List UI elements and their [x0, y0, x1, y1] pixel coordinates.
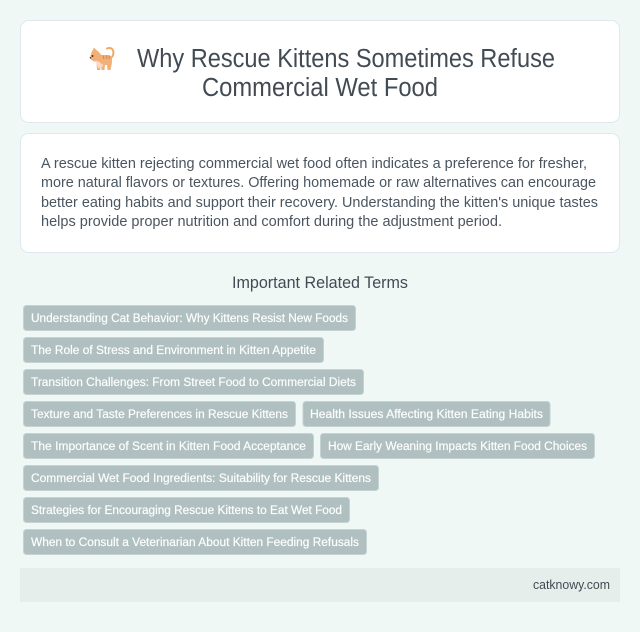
summary text: more natural flavors or textures. Offering homemade or raw alternatives can encourage [41, 175, 596, 191]
summary text: helps provide proper nutrition and comfort during the adjustment period. [41, 214, 502, 230]
tag [320, 434, 594, 458]
tag list [24, 306, 594, 554]
title: Why Rescue Kittens Sometimes Refuse [137, 45, 555, 73]
tag [303, 402, 550, 426]
tag [24, 306, 356, 330]
panel: summary card [20, 134, 620, 252]
icon: orange cat [90, 48, 113, 70]
tag [24, 498, 350, 522]
summary text: better eating habits and support their recovery. Understanding the kitten's unique tastes [41, 195, 598, 211]
tag [24, 338, 324, 362]
tag [24, 370, 364, 394]
summary text [41, 156, 598, 230]
tag: Texture and Taste Preferences in Rescue Kittens [31, 407, 288, 421]
title: Commercial Wet Food [202, 74, 438, 102]
tag: Health Issues Affecting Kitten Eating Habits [310, 407, 543, 421]
panel: title card [20, 20, 620, 122]
tag: How Early Weaning Impacts Kitten Food Choices [328, 439, 587, 453]
tag: The Role of Stress and Environment in Kitten Appetite [31, 343, 316, 357]
tag: Commercial Wet Food Ingredients: Suitability for Rescue Kittens [31, 471, 371, 485]
footer bar: catknowy.com [533, 577, 610, 592]
footer bar [20, 568, 620, 602]
tag [24, 402, 296, 426]
summary text: A rescue kitten rejecting commercial wet food often indicates a preference for fresher, [41, 156, 587, 172]
title [137, 45, 555, 102]
tag [24, 530, 366, 554]
tag [24, 434, 314, 458]
tag: Understanding Cat Behavior: Why Kittens Resist New Foods [31, 311, 348, 325]
tag [24, 466, 378, 490]
tag: The Importance of Scent in Kitten Food Acceptance [31, 439, 306, 453]
tag: When to Consult a Veterinarian About Kitten Feeding Refusals [31, 535, 359, 549]
tag: Strategies for Encouraging Rescue Kittens to Eat Wet Food [31, 503, 342, 517]
tag: Transition Challenges: From Street Food to Commercial Diets [31, 375, 356, 389]
heading: related terms: Important Related Terms [232, 274, 408, 292]
